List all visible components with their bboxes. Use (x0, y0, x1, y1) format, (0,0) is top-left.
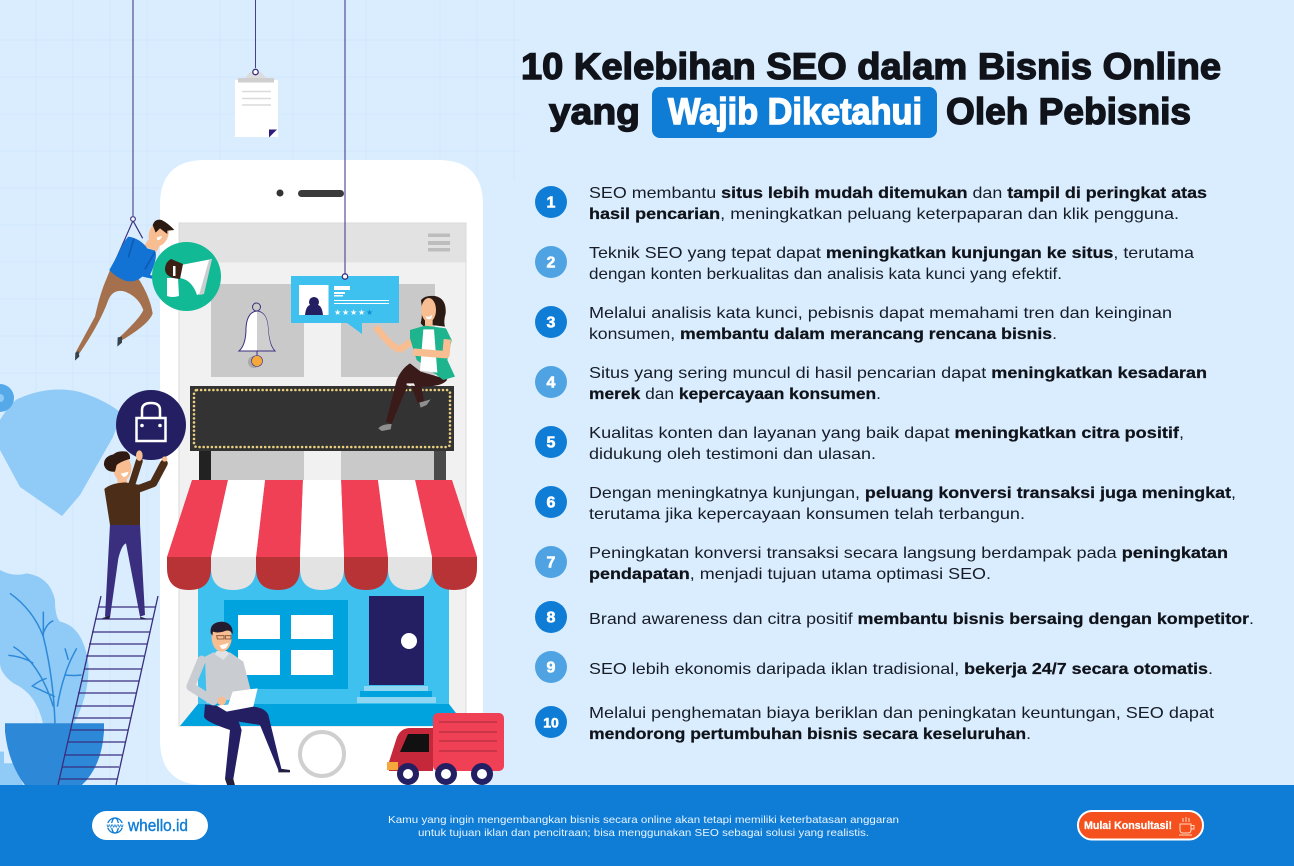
ladder (58, 596, 158, 785)
item 6: Dengan meningkatnya kunjungan, peluang konversi transaksi juga meningkat , (589, 485, 1236, 502)
plant (0, 570, 104, 785)
consult button (1078, 811, 1203, 840)
item 8: Brand awareness dan citra positif membantu bisnis bersaing dengan kompetitor . (589, 611, 1254, 628)
benefit list (535, 185, 1254, 743)
item 10: mendorong pertumbuhan bisnis secara keseluruhan . (589, 726, 1031, 743)
item 2: 2 (547, 254, 556, 272)
review speech bubble: ★ (358, 308, 365, 317)
review speech bubble: ★ (350, 308, 357, 317)
phone screen (179, 223, 466, 726)
man with laptop (191, 622, 290, 787)
item 5: Kualitas konten dan layanan yang baik dapat meningkatkan citra positif , (589, 425, 1184, 442)
woman sitting on sign (376, 296, 455, 431)
awning (167, 480, 477, 590)
item 2: Teknik SEO yang tepat dapat meningkatkan kunjungan ke situs , terutama (589, 245, 1194, 262)
item 2 (535, 245, 1194, 283)
title: Oleh Pebisnis (946, 91, 1191, 132)
phone (160, 160, 483, 785)
delivery truck (387, 713, 504, 782)
title (521, 46, 1221, 138)
title: 10 Kelebihan SEO dalam Bisnis Online (521, 46, 1221, 87)
bell icon (239, 303, 275, 368)
title highlight pill: Wajib Diketahui (668, 91, 922, 132)
item 7 (535, 545, 1228, 583)
man holding padlock (102, 450, 167, 619)
shop building (180, 570, 466, 726)
item 1: SEO membantu situs lebih mudah ditemukan dan tampil di peringkat atas (589, 185, 1207, 202)
item 4: merek dan kepercayaan konsumen . (589, 386, 881, 403)
website pill: www (105, 824, 124, 830)
item 1 (535, 185, 1207, 223)
item 7: pendapatan , menjadi tujuan utama optimasi SEO. (589, 566, 991, 583)
item 3: konsumen, membantu dalam merancang rencana bisnis . (589, 326, 1057, 343)
heart shape (0, 384, 120, 516)
footer note: untuk tujuan iklan dan pencitraan; bisa menggunakan SEO sebagai solusi yang realistis. (418, 827, 869, 839)
item 5: didukung oleh testimoni dan ulasan. (589, 446, 876, 463)
footer bar (0, 785, 1294, 866)
review speech bubble: ★ (366, 308, 373, 317)
item 9 (535, 651, 1213, 683)
shop door (357, 596, 436, 703)
item 3: 3 (547, 314, 556, 332)
item 1: 1 (547, 194, 556, 212)
hanging note (235, 0, 278, 138)
review speech bubble: ★ (342, 308, 349, 317)
item 3: Melalui analisis kata kunci, pebisnis dapat memahami tren dan keinginan (589, 305, 1172, 322)
item 6 (535, 485, 1236, 523)
item 6: terutama jika kepercayaan konsumen telah terbangun. (589, 506, 1025, 523)
item 10: 10 (543, 714, 559, 730)
consult button: Mulai Konsultasi! (1084, 820, 1172, 832)
home button (300, 732, 344, 776)
item 8 (535, 601, 1254, 633)
title: yang (549, 91, 640, 132)
icon: megaphone (152, 242, 221, 311)
item 4 (535, 365, 1207, 403)
item 1: hasil pencarian , meningkatkan peluang keterpaparan dan klik pengguna. (589, 206, 1179, 223)
item 7: Peningkatan konversi transaksi secara langsung berdampak pada peningkatan (589, 545, 1228, 562)
item 5: 5 (547, 434, 556, 452)
item 10 (535, 705, 1215, 743)
website pill: whello.id (127, 816, 188, 835)
footer note: Kamu yang ingin mengembangkan bisnis secara online akan tetapi memiliki keterbatasan anggaran (388, 814, 899, 826)
item 9: SEO lebih ekonomis daripada iklan tradisional, bekerja 24/7 secara otomatis . (589, 661, 1213, 678)
item 5 (535, 425, 1184, 463)
item 4: 4 (547, 374, 556, 392)
item 7: 7 (547, 554, 556, 572)
item 6: 6 (547, 494, 556, 512)
review speech bubble (291, 0, 399, 334)
item 10: Melalui penghematan biaya beriklan dan peningkatan keuntungan, SEO dapat (589, 705, 1215, 722)
item 8: 8 (547, 610, 556, 626)
shop sign (190, 386, 454, 481)
man with megaphone (75, 0, 174, 361)
website pill (92, 811, 208, 840)
icon: padlock (116, 390, 186, 460)
item 3 (535, 305, 1172, 343)
shop window (224, 600, 348, 689)
item 4: Situs yang sering muncul di hasil pencarian dapat meningkatkan kesadaran (589, 365, 1207, 382)
item 9: 9 (547, 660, 556, 676)
footer note (388, 814, 899, 839)
review speech bubble: ★ (334, 308, 341, 317)
item 2: dengan konten berkualitas dan analisis kata kunci yang efektif. (589, 266, 1062, 283)
